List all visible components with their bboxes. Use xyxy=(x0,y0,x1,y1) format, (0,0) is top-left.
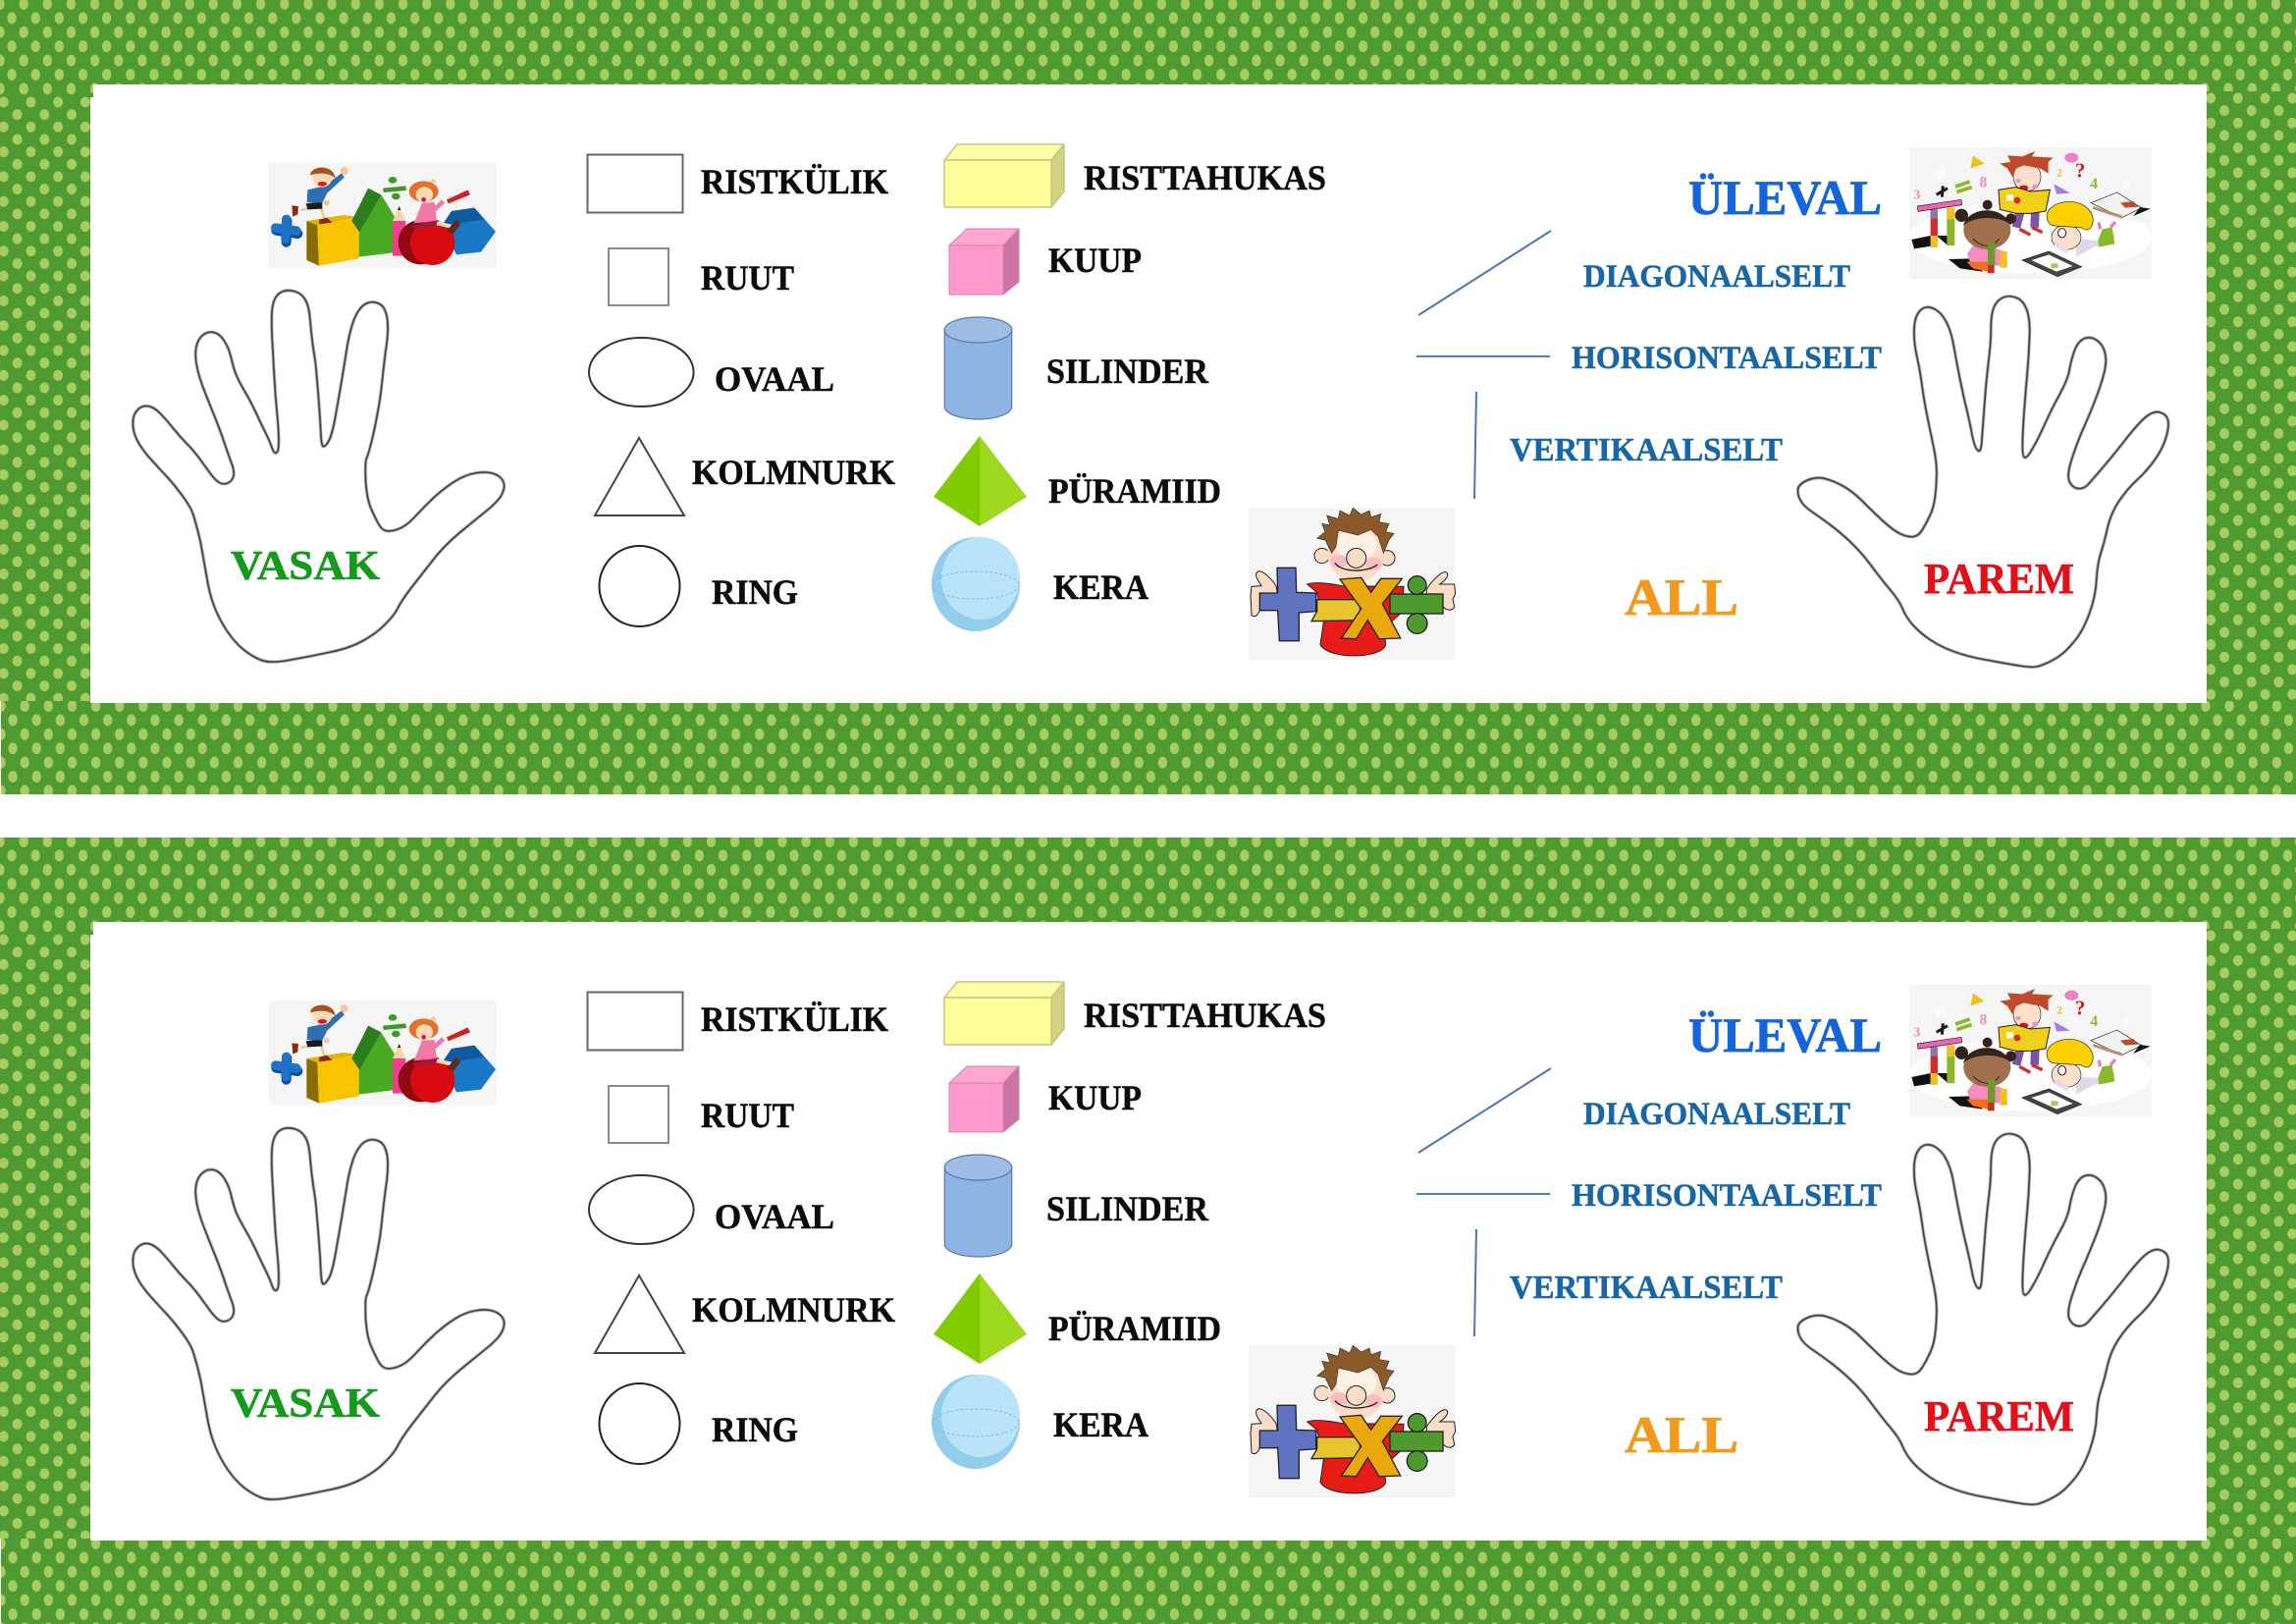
label: RUUT: RUUT xyxy=(701,1096,794,1135)
oval shape xyxy=(589,1175,694,1244)
label: PAREM: PAREM xyxy=(1924,555,2074,603)
oval shape xyxy=(589,338,694,406)
label: PÜRAMIID: PÜRAMIID xyxy=(1048,471,1221,511)
label: RISTKÜLIK: RISTKÜLIK xyxy=(701,162,888,201)
label: RUUT: RUUT xyxy=(701,258,794,298)
label: DIAGONAALSELT: DIAGONAALSELT xyxy=(1583,1097,1850,1132)
label: ÜLEVAL: ÜLEVAL xyxy=(1688,170,1882,225)
label: VASAK: VASAK xyxy=(231,544,380,589)
label: ÜLEVAL: ÜLEVAL xyxy=(1688,1007,1882,1062)
rectangle shape xyxy=(587,992,683,1051)
rectangle shape xyxy=(587,155,683,212)
square shape xyxy=(609,1086,668,1143)
panel: upper card xyxy=(0,0,2296,794)
label: OVAAL: OVAAL xyxy=(715,1197,834,1236)
vertical line xyxy=(1474,392,1476,499)
label: ALL: ALL xyxy=(1625,569,1738,626)
diagonal line xyxy=(1418,231,1551,315)
label: RISTTAHUKAS: RISTTAHUKAS xyxy=(1084,996,1326,1035)
icon: boy with math signs xyxy=(1249,1345,1456,1497)
horizontal line xyxy=(1416,1193,1550,1195)
panel: lower card xyxy=(0,838,2296,1624)
label: SILINDER: SILINDER xyxy=(1046,352,1209,391)
sphere shape xyxy=(932,537,1020,631)
cuboid shape xyxy=(944,144,1064,207)
label: KERA: KERA xyxy=(1053,568,1148,607)
label: RING: RING xyxy=(712,1410,798,1449)
circle shape xyxy=(599,1383,679,1464)
label: KOLMNURK: KOLMNURK xyxy=(692,453,895,492)
label: OVAAL: OVAAL xyxy=(715,359,834,399)
label: RISTTAHUKAS: RISTTAHUKAS xyxy=(1084,158,1326,197)
label: SILINDER: SILINDER xyxy=(1046,1189,1209,1228)
horizontal line xyxy=(1416,355,1550,357)
label: VERTIKAALSELT: VERTIKAALSELT xyxy=(1510,1270,1783,1306)
label: HORISONTAALSELT: HORISONTAALSELT xyxy=(1572,341,1882,376)
label: RISTKÜLIK: RISTKÜLIK xyxy=(701,1000,888,1039)
label: PÜRAMIID: PÜRAMIID xyxy=(1048,1309,1221,1348)
right hand outline xyxy=(1798,1134,2168,1504)
right hand outline xyxy=(1798,297,2168,667)
label: KERA: KERA xyxy=(1053,1405,1148,1444)
pyramid shape xyxy=(934,1273,1027,1364)
label: ALL: ALL xyxy=(1625,1407,1738,1464)
cube shape xyxy=(949,229,1019,295)
cube shape xyxy=(949,1066,1019,1132)
label: RING: RING xyxy=(712,572,798,612)
pyramid shape xyxy=(934,436,1027,526)
vertical line xyxy=(1474,1229,1476,1336)
label: VERTIKAALSELT: VERTIKAALSELT xyxy=(1510,432,1783,468)
square shape xyxy=(609,248,668,305)
icon: children with shapes xyxy=(268,1001,497,1106)
cylinder shape xyxy=(944,317,1012,419)
circle shape xyxy=(599,546,679,626)
label: KUUP: KUUP xyxy=(1048,1078,1142,1117)
cuboid shape xyxy=(944,982,1064,1045)
icon: boy with math signs xyxy=(1249,508,1456,660)
triangle shape xyxy=(595,438,684,515)
triangle shape xyxy=(595,1275,684,1353)
label: KOLMNURK: KOLMNURK xyxy=(692,1290,895,1329)
label: KUUP: KUUP xyxy=(1048,241,1142,280)
label: VASAK: VASAK xyxy=(231,1381,380,1427)
left hand outline xyxy=(133,1128,505,1499)
label: DIAGONAALSELT: DIAGONAALSELT xyxy=(1583,259,1850,295)
cylinder shape xyxy=(944,1155,1012,1257)
sphere shape xyxy=(932,1375,1020,1469)
label: HORISONTAALSELT: HORISONTAALSELT xyxy=(1572,1178,1882,1214)
icon: children learning xyxy=(1909,985,2152,1116)
icon: children learning xyxy=(1909,147,2152,279)
left hand outline xyxy=(133,291,505,662)
label: PAREM: PAREM xyxy=(1924,1392,2074,1440)
icon: children with shapes xyxy=(268,163,497,268)
diagonal line xyxy=(1418,1068,1551,1153)
